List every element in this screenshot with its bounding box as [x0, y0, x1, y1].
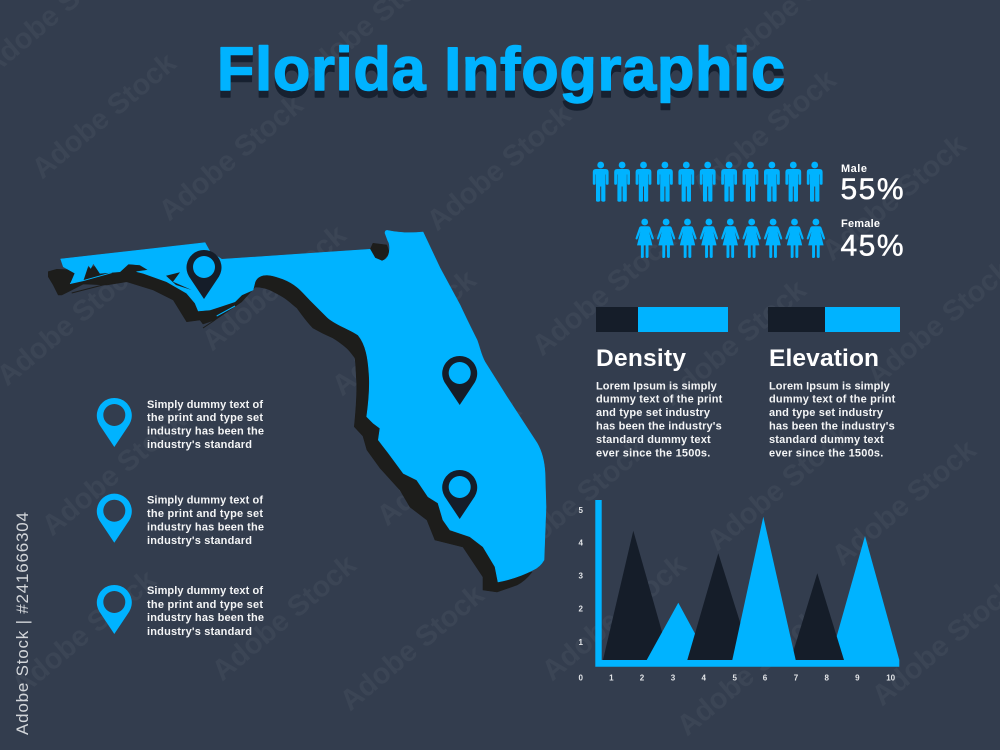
watermark pattern: Adobe Stock	[671, 603, 828, 742]
density heading: Density	[596, 345, 686, 372]
elevation text	[769, 380, 896, 460]
watermark pattern: Adobe Stock	[6, 563, 163, 702]
x axis labels: 10	[886, 674, 896, 682]
panel: elevation	[768, 307, 900, 460]
chart: triangle peaks	[578, 500, 899, 682]
male label: 55%	[840, 173, 904, 206]
density bar	[596, 307, 728, 332]
icon: pin	[97, 585, 132, 634]
density text	[596, 380, 723, 460]
y axis labels: 0	[578, 674, 583, 682]
density text: dummy text of the print	[596, 394, 723, 406]
legend text: Simply dummy text of	[147, 585, 263, 597]
peak 6	[830, 536, 899, 660]
watermark pattern: Adobe Stock	[421, 98, 578, 237]
y axis labels	[578, 506, 583, 682]
y axis labels: 5	[578, 506, 583, 515]
map shape	[61, 230, 546, 582]
legend text: the print and type set	[147, 508, 263, 520]
y axis labels: 2	[578, 604, 583, 614]
elevation text: and type set industry	[769, 407, 884, 419]
legend text: Simply dummy text of	[147, 494, 263, 506]
x axis labels: 9	[855, 674, 860, 682]
density text: Lorem Ipsum is simply	[596, 380, 718, 392]
peak 3	[687, 553, 752, 660]
female label: Female	[841, 218, 880, 230]
elevation heading: Elevation	[769, 345, 879, 372]
watermark pattern: Adobe Stock	[536, 548, 693, 687]
female icons row	[636, 219, 825, 258]
icon: pin	[97, 398, 132, 447]
panel: density	[596, 307, 728, 460]
density text: standard dummy text	[596, 434, 711, 446]
watermark pattern: Adobe Stock	[206, 548, 363, 687]
x axis labels: 1	[609, 674, 614, 682]
watermark pattern: Adobe Stock	[701, 418, 858, 557]
x axis labels: 8	[824, 674, 829, 682]
watermark pattern: Adobe Stock	[26, 46, 183, 185]
x axis labels: 4	[701, 674, 706, 682]
x axis labels: 2	[640, 674, 645, 682]
watermark pattern: Adobe Stock	[326, 263, 483, 402]
legend text: industry's standard	[147, 535, 252, 547]
watermark pattern: Adobe Stock	[686, 63, 843, 202]
map: Florida	[48, 230, 546, 592]
map shadow	[48, 243, 532, 592]
y axis labels: 3	[578, 572, 583, 580]
icon: pin	[97, 494, 132, 543]
legend text	[147, 399, 264, 451]
elevation text: has been the industry's	[769, 421, 895, 433]
peak 5	[791, 573, 844, 660]
density text: ever since the 1500s.	[596, 448, 710, 460]
map pin 1	[186, 250, 222, 299]
peak 2	[647, 603, 709, 660]
x axis labels: 7	[794, 674, 799, 682]
watermark pattern: Adobe Stock	[196, 218, 353, 357]
density text: has been the industry's	[596, 421, 722, 433]
watermark pattern: Adobe Stock	[816, 128, 973, 267]
female label: 45%	[840, 230, 904, 262]
male icons row	[593, 162, 823, 202]
legend item 3	[97, 585, 264, 638]
watermark pattern: Adobe Stock	[153, 88, 310, 227]
legend text	[147, 585, 264, 638]
legend text: the print and type set	[147, 599, 263, 611]
elevation text: standard dummy text	[769, 434, 884, 446]
watermark pattern: Adobe Stock	[334, 578, 491, 717]
y axis labels: 4	[578, 538, 583, 548]
peak 1	[603, 531, 670, 660]
legend text: industry has been the	[147, 522, 264, 534]
male label: Male	[841, 163, 867, 175]
x axis labels: 6	[763, 674, 768, 682]
stock id vertical text: Adobe Stock | #241666304	[13, 512, 32, 735]
legend item 2	[97, 494, 264, 547]
watermark pattern: Adobe Stock	[526, 223, 683, 362]
map pin 3	[442, 470, 477, 519]
panhandle island details	[70, 272, 235, 316]
y axis labels: 1	[578, 638, 583, 647]
map pin 2	[442, 356, 477, 405]
title: Florida Infographic	[217, 42, 785, 110]
watermark pattern: Adobe Stock	[371, 393, 528, 532]
elevation text: ever since the 1500s.	[769, 448, 883, 460]
watermark pattern: Adobe Stock	[656, 273, 813, 412]
elevation bar	[768, 307, 900, 332]
peak 4	[732, 517, 796, 660]
legend text: industry has been the	[147, 612, 264, 624]
title: Florida Infographic	[217, 35, 785, 103]
x axis labels: 3	[671, 674, 676, 682]
legend text: industry's standard	[147, 626, 252, 638]
elevation text: dummy text of the print	[769, 394, 896, 406]
watermark pattern: Adobe Stock	[496, 433, 653, 572]
elevation text: Lorem Ipsum is simply	[769, 380, 891, 392]
x axis labels: 5	[732, 674, 737, 682]
legend text: industry's standard	[147, 439, 252, 451]
chart axes	[595, 500, 899, 667]
x axis labels	[609, 674, 896, 682]
legend text	[147, 494, 264, 547]
watermark pattern: Adobe Stock	[36, 403, 193, 542]
legend text: Simply dummy text of	[147, 399, 263, 411]
watermark pattern: Adobe Stock	[826, 433, 983, 572]
legend text: industry has been the	[147, 426, 264, 438]
density text: and type set industry	[596, 407, 711, 419]
legend text: the print and type set	[147, 412, 263, 424]
legend item 1	[97, 398, 264, 451]
